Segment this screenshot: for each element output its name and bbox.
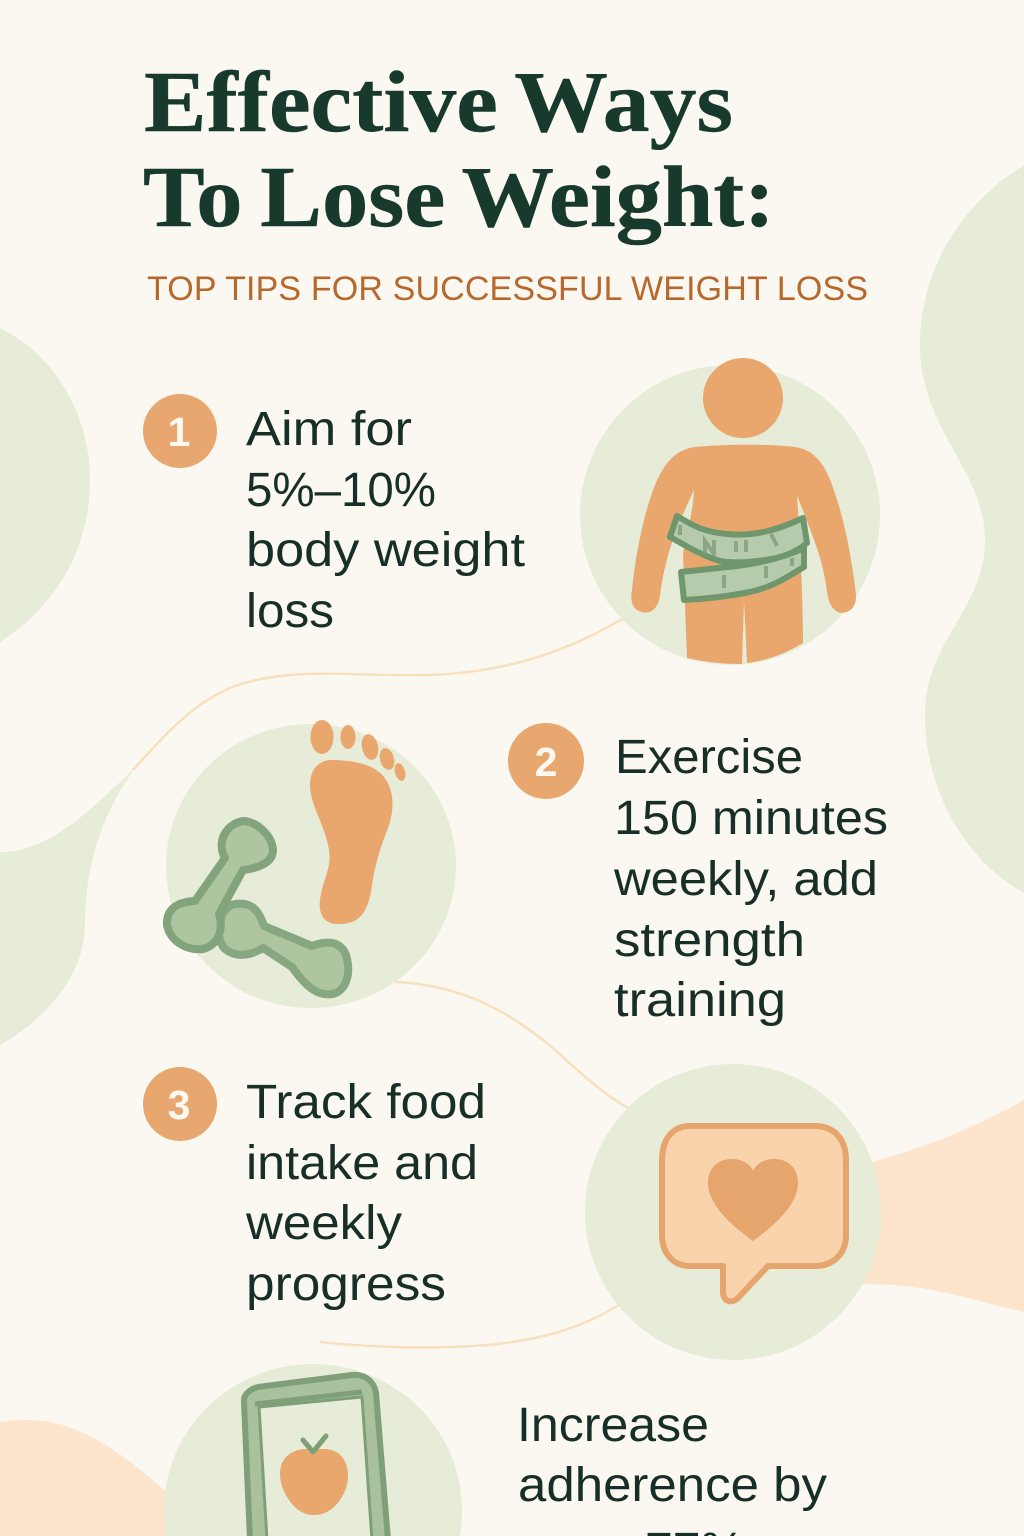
tip 4 text	[517, 1399, 827, 1536]
background blob: left middle	[0, 768, 135, 1045]
icon: foot and dumbbells	[166, 720, 456, 1008]
tip 2 badge	[508, 723, 584, 799]
tip 1 text: loss	[246, 585, 334, 638]
tip 2 text: 150 minutes	[614, 792, 888, 845]
tip 1 badge: 1	[168, 409, 190, 455]
tip 2 text: training	[614, 974, 786, 1027]
tip 3 text: progress	[246, 1258, 446, 1311]
tip 3 text	[245, 1076, 486, 1311]
tip 2 badge: 2	[535, 739, 557, 785]
background blob: right	[920, 165, 1024, 893]
tip 1 text	[246, 403, 525, 638]
tip 1 text: Aim for	[246, 403, 412, 456]
background blob: right peach	[850, 1100, 1024, 1312]
title: Effective Ways	[144, 53, 733, 150]
apple	[280, 1449, 348, 1515]
title	[143, 53, 775, 245]
tip 2 text	[613, 731, 888, 1027]
dumbbell 1	[167, 821, 273, 949]
connector line 3	[320, 1303, 622, 1348]
tip 3 badge: 3	[168, 1082, 190, 1128]
tip 1 text: body weight	[246, 524, 525, 577]
icon: phone with apple	[164, 1364, 462, 1536]
tip 3 text: intake and	[246, 1137, 478, 1190]
background blob: left top	[0, 328, 90, 642]
foot	[310, 720, 407, 924]
tip 3 badge	[143, 1067, 217, 1141]
tip 3 text: weekly	[245, 1197, 402, 1250]
tip 1 text: 5%–10%	[246, 464, 436, 517]
tape upper	[670, 516, 807, 562]
dumbbell 2	[219, 904, 348, 994]
tip 1 badge	[143, 394, 217, 468]
tape lower	[681, 548, 804, 600]
title: To Lose Weight:	[143, 148, 775, 245]
background blob: bottom left peach	[0, 1420, 175, 1536]
icon: body with measuring tape	[580, 358, 880, 665]
tip 2 text: weekly, add	[613, 853, 878, 906]
connector line 2	[395, 982, 628, 1108]
tip 3 text: Track food	[246, 1076, 486, 1129]
tip 2 text: Exercise	[615, 731, 803, 784]
icon: chat bubble with heart	[585, 1064, 881, 1360]
tip 4 text: adherence by	[518, 1459, 827, 1512]
tip 2 text: strength	[614, 914, 805, 967]
subtitle: TOP TIPS FOR SUCCESSFUL WEIGHT LOSS	[147, 270, 868, 308]
tip 4 text: Increase	[517, 1399, 709, 1452]
connector line 1	[133, 619, 622, 770]
